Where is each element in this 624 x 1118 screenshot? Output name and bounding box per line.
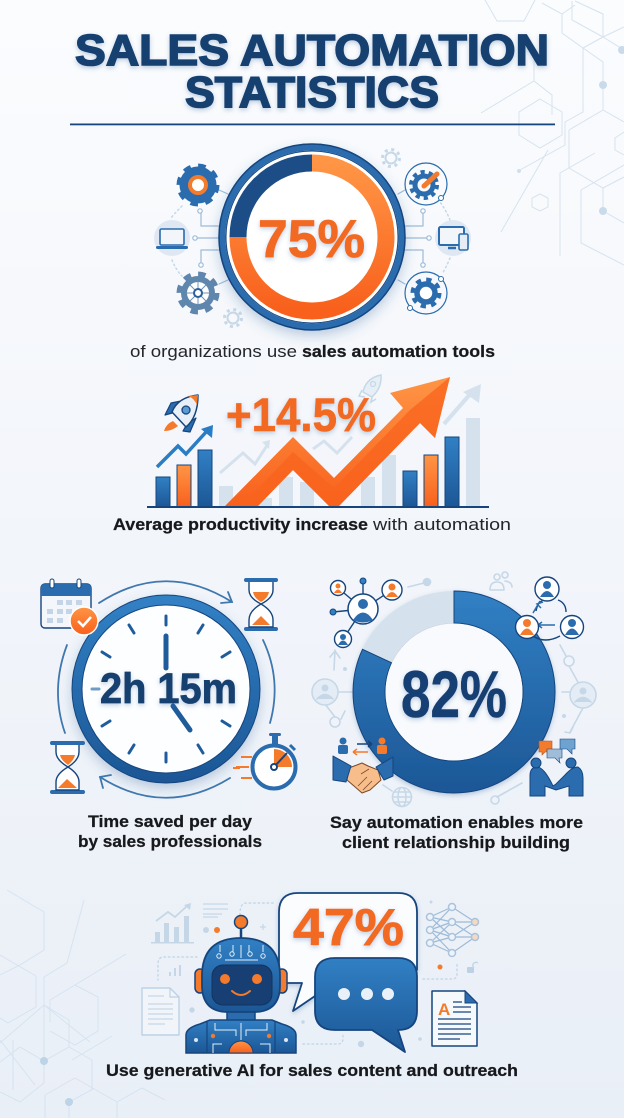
caption: time saved: by sales professionals	[78, 832, 262, 851]
icon: hourglass bottom left	[50, 741, 85, 794]
value: 82%: 82%	[401, 657, 507, 731]
neural network icon	[426, 904, 478, 956]
caption: productivity: with automation	[372, 515, 511, 534]
blue speech bubble	[315, 958, 417, 1052]
white speech bubble	[279, 893, 417, 1011]
icon: wrench gear in circle	[405, 163, 447, 205]
caption: time saved: Time saved per day	[88, 812, 253, 831]
icon: gear with orange core	[179, 166, 217, 204]
caption: relationship building: Say automation enables more	[330, 813, 583, 832]
robot neck	[227, 1010, 255, 1022]
panel: productivity increase	[113, 375, 511, 534]
value: +14.5%: +14.5%	[226, 388, 376, 441]
faint decorations and dotted connectors	[158, 900, 478, 1047]
icon: handshake with exchange	[333, 738, 393, 793]
panel: client relationship building	[312, 572, 596, 852]
big orange growth arrow	[224, 377, 450, 507]
document with letter A icon	[432, 991, 477, 1046]
caption: relationship building: client relationship building	[342, 833, 570, 852]
document with letter A icon: A	[438, 1000, 450, 1019]
donut chart: 75 percent	[219, 144, 405, 330]
faint background bars and trend lines	[219, 384, 481, 507]
bar chart: left	[156, 450, 212, 507]
icon: robot	[186, 916, 296, 1053]
faint chart icon	[151, 903, 194, 944]
faint network decorations	[312, 572, 596, 804]
icon: faint rocket	[359, 375, 381, 402]
robot face	[212, 965, 272, 1005]
trend arrow: left	[157, 425, 213, 467]
robot ears	[195, 969, 287, 993]
icon: faint globe	[383, 785, 412, 806]
icon: laptop	[154, 220, 190, 256]
icon: stopwatch	[233, 733, 296, 788]
panel: 75 percent donut section	[130, 144, 495, 361]
faint document icon	[142, 988, 179, 1035]
caption: sales automation tools	[130, 342, 495, 361]
cycle arrows around clock	[58, 581, 275, 798]
caption: sales automation tools: of organizations use	[130, 342, 297, 361]
icon: gear in circle	[405, 272, 447, 314]
connector circuit lines	[171, 190, 450, 284]
icon: monitor and phone	[435, 220, 471, 256]
bar chart: right	[403, 437, 459, 507]
clock	[72, 595, 260, 783]
chart baseline	[147, 506, 489, 508]
value: 47%: 47%	[293, 899, 404, 957]
title: STATISTICS	[185, 68, 439, 117]
icon: calendar with check	[41, 579, 98, 635]
caption: time saved	[78, 812, 262, 851]
icon: rocket	[164, 395, 198, 432]
background hexagon network: bottom left	[0, 890, 165, 1118]
caption: productivity	[113, 515, 511, 534]
icon: gray gear	[179, 274, 217, 312]
donut chart: 82 percent	[353, 591, 555, 793]
value: 75%: 75%	[258, 210, 365, 269]
caption: sales automation tools: sales automation tools	[302, 342, 495, 361]
icon: small faint gear lower	[224, 310, 242, 326]
caption: generative AI: Use generative AI for sales content and outreach	[106, 1061, 518, 1080]
panel: generative AI	[106, 893, 518, 1080]
icon: two people shaking hands with speech bubbles	[530, 739, 583, 796]
caption: relationship building	[330, 813, 583, 852]
icon: people network top left	[330, 578, 402, 648]
panel: time saved	[41, 578, 296, 851]
title rule	[70, 124, 555, 125]
icon: people cycle top right	[516, 577, 584, 640]
title	[75, 26, 549, 117]
caption: productivity: Average productivity increase	[113, 515, 368, 534]
robot body	[186, 1020, 296, 1053]
robot head	[202, 938, 280, 1012]
value: 2h 15m: 2h 15m	[100, 665, 237, 713]
background hexagon network: top right	[481, 0, 624, 265]
robot circuit lines	[217, 945, 265, 960]
icon: hourglass top right	[244, 578, 278, 631]
robot antenna	[234, 916, 248, 940]
icon: small faint gear upper	[382, 150, 400, 166]
title: SALES AUTOMATION	[75, 26, 549, 75]
